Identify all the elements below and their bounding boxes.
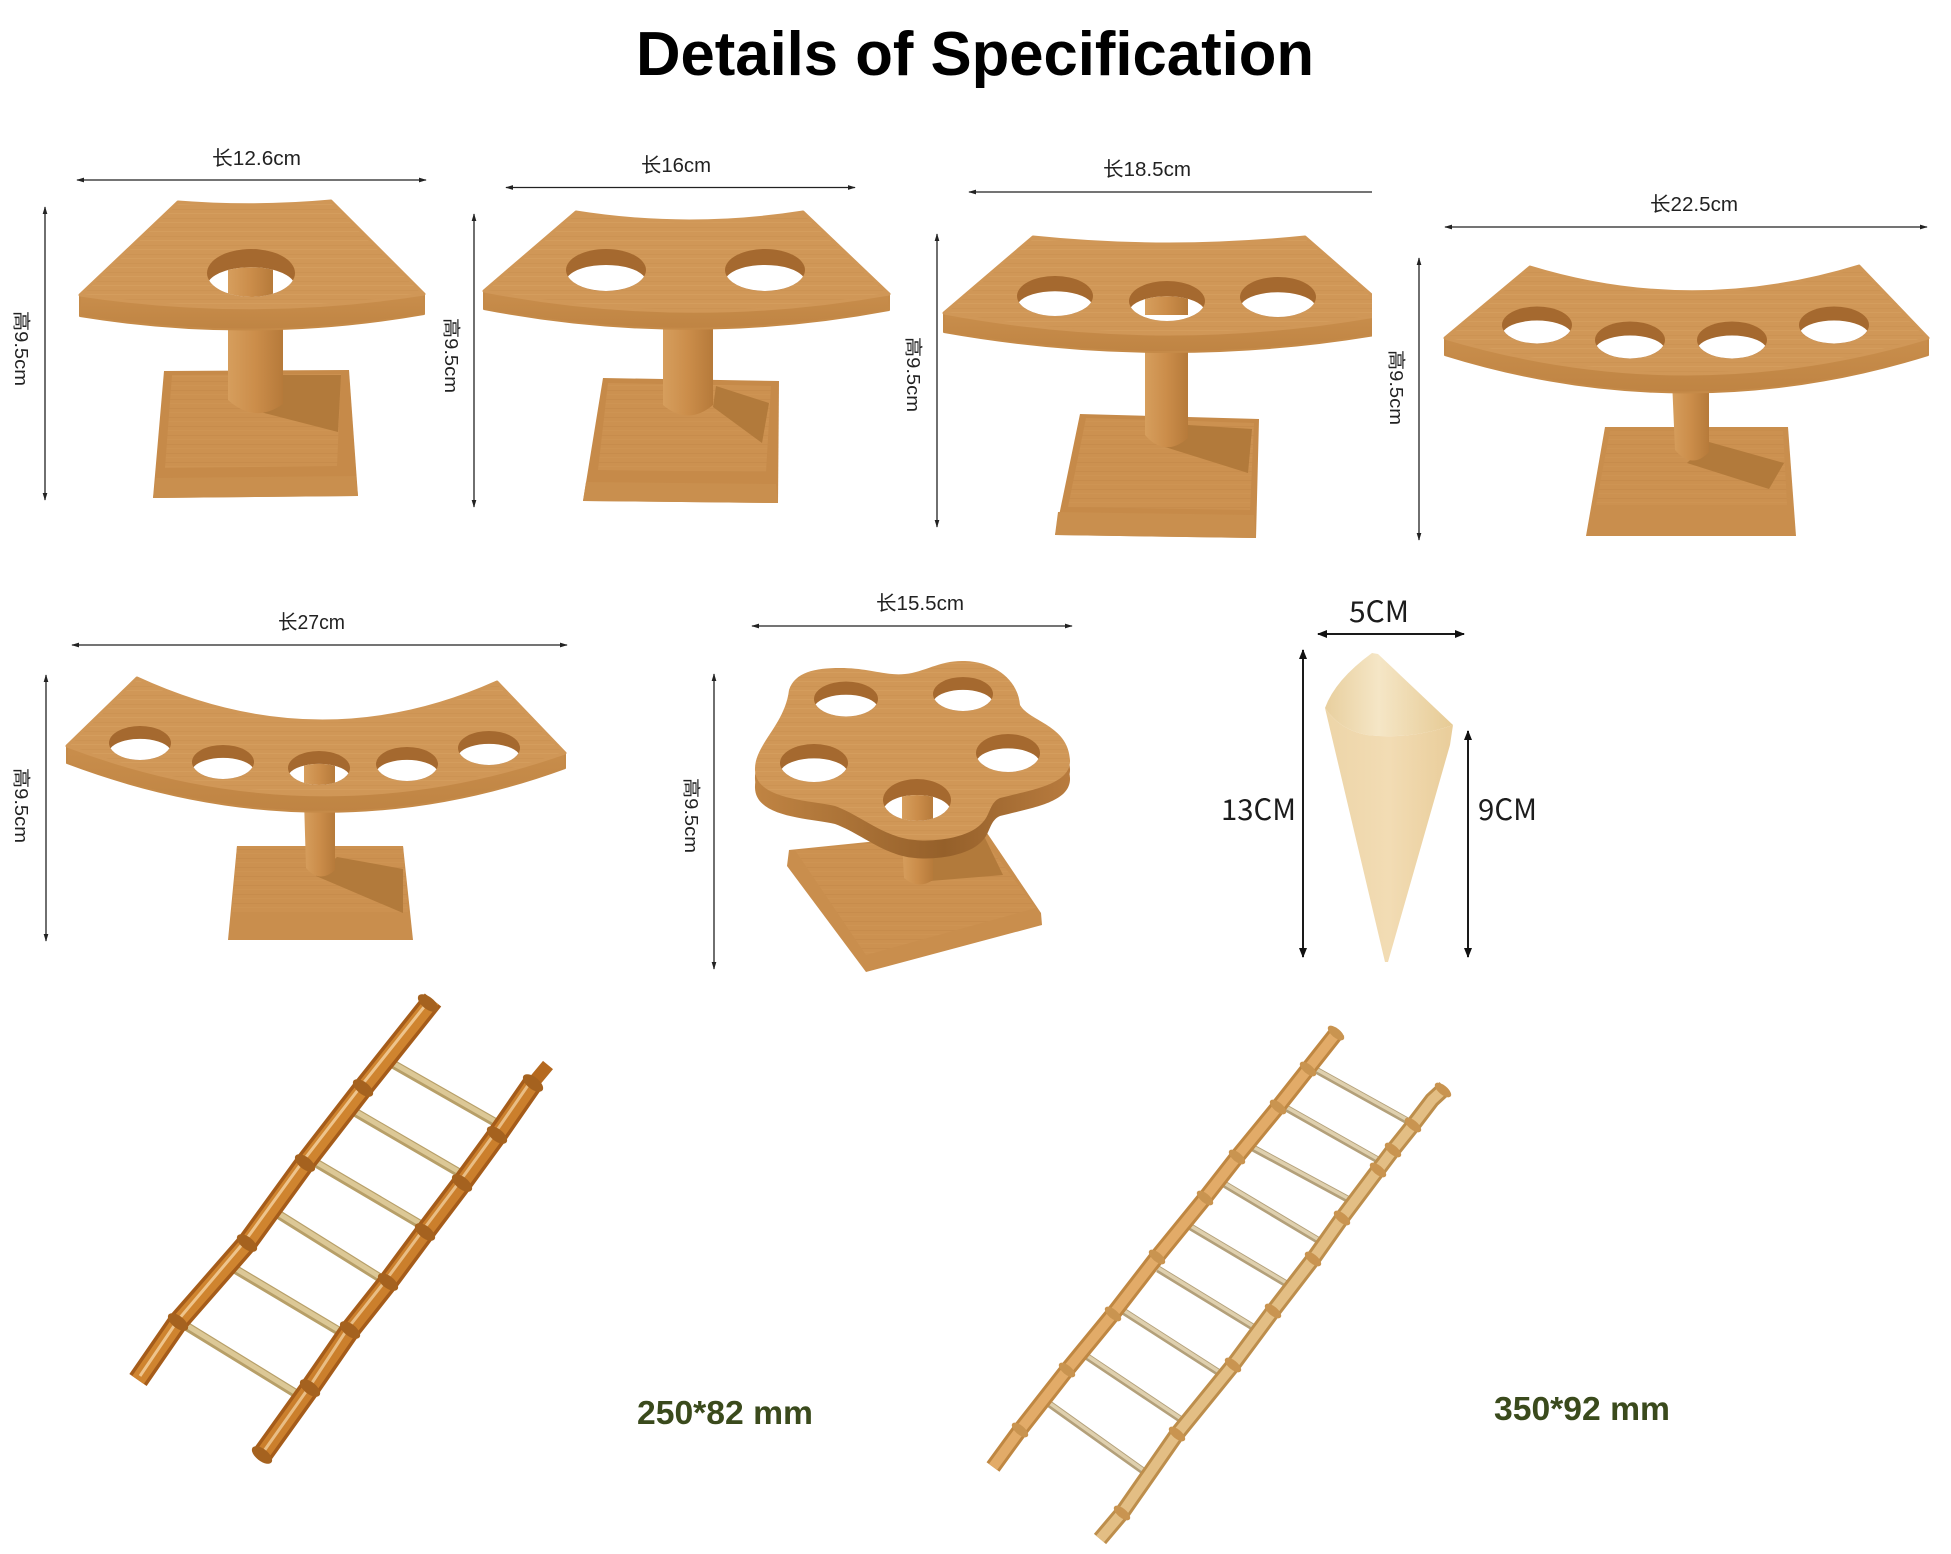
size label: 250*82 mm: [637, 1394, 813, 1431]
panel: light bamboo ladder 350*92 mm: [993, 1023, 1670, 1539]
body height dimension 9CM: 9CM: [1478, 787, 1537, 829]
title: Details of Specification: [636, 20, 1314, 89]
panel: dark bamboo ladder 250*82 mm: [138, 991, 813, 1467]
height dimension 9.5cm: 高9.5cm: [903, 337, 923, 412]
panel: stand with one hole: [11, 147, 426, 500]
panel: paw-shaped stand: [681, 592, 1072, 972]
length dimension 18.5cm: 长18.5cm: [1103, 158, 1191, 181]
panel: stand with two holes: [441, 154, 889, 507]
length dimension 27cm: 长27cm: [278, 611, 345, 634]
length dimension 22.5cm: 长22.5cm: [1650, 193, 1738, 216]
height dimension 9.5cm: 高9.5cm: [681, 778, 701, 853]
stand illustration: [755, 661, 1070, 972]
stand illustration: [1445, 266, 1928, 536]
length dimension 16cm: 长16cm: [641, 154, 711, 177]
length dimension 12.6cm: 长12.6cm: [212, 147, 301, 170]
panel: stand with three holes: [903, 158, 1392, 538]
height dimension 9.5cm: 高9.5cm: [11, 768, 31, 843]
stand illustration: [67, 678, 565, 940]
stand illustration: [80, 201, 424, 498]
height dimension 9.5cm: 高9.5cm: [1386, 350, 1406, 425]
size label: 350*92 mm: [1494, 1390, 1670, 1427]
total height dimension 13CM: 13CM: [1221, 787, 1296, 829]
stand illustration: [484, 212, 889, 503]
ladder illustration: [138, 991, 548, 1467]
height dimension 9.5cm: 高9.5cm: [11, 311, 31, 386]
length dimension 15.5cm: 长15.5cm: [876, 592, 964, 615]
panel: stand with five holes: [11, 611, 567, 941]
ladder illustration: [993, 1023, 1454, 1539]
stand illustration: [944, 237, 1392, 538]
panel: stand with four holes: [1386, 193, 1928, 540]
height dimension 9.5cm: 高9.5cm: [441, 318, 461, 393]
panel: wooden cone: [1221, 589, 1537, 962]
width dimension 5CM: 5CM: [1349, 589, 1409, 631]
cone illustration: [1325, 653, 1453, 962]
